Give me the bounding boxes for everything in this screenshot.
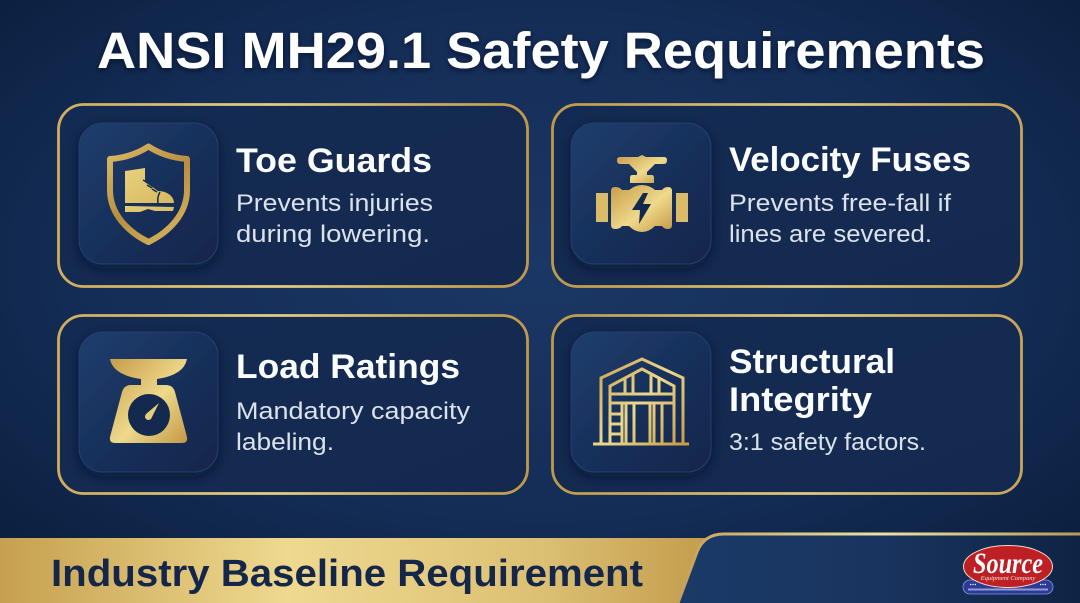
icon tile: load ratings: [79, 332, 218, 472]
heading: structural integrity: Structural: [729, 343, 895, 381]
text: structural integrity description: 3:1 safety factors.: [729, 429, 926, 456]
heading: velocity fuses: Velocity Fuses: [729, 141, 971, 179]
text: load ratings description: labeling.: [236, 429, 334, 456]
heading: toe guards: Toe Guards: [236, 142, 432, 180]
panel: structural integrity: [552, 316, 1022, 494]
icon: weighing scale: [110, 359, 187, 443]
icon: shield with boot: [110, 146, 187, 242]
icon tile: toe guards: [79, 123, 218, 264]
text: toe guards description: [236, 190, 433, 248]
logo: Source Equipment Company: Equipment Company: [980, 575, 1035, 582]
panel: toe guards: [58, 104, 528, 286]
panel: load ratings: [58, 316, 528, 494]
icon: building frame: [593, 359, 689, 444]
footer navy panel: [678, 534, 1080, 603]
icon tile: velocity fuses: [571, 123, 711, 264]
text: toe guards description: during lowering.: [236, 221, 430, 248]
panel: velocity fuses: [552, 104, 1022, 286]
heading: structural integrity: [729, 343, 895, 419]
text: velocity fuses description: [729, 190, 951, 248]
logo: Source Equipment Company: [963, 546, 1053, 594]
heading: structural integrity: Integrity: [729, 381, 872, 419]
footer label: Industry Baseline Requirement: [51, 553, 643, 595]
text: velocity fuses description: lines are severed.: [729, 221, 932, 248]
icon: valve with lightning bolt: [596, 155, 688, 232]
heading: load ratings: Load Ratings: [236, 348, 460, 386]
text: velocity fuses description: Prevents free-fall if: [729, 190, 951, 217]
text: toe guards description: Prevents injuries: [236, 190, 433, 217]
icon tile: structural integrity: [571, 332, 711, 472]
footer gold band: [0, 538, 720, 603]
logo: Source Equipment Company: Source: [973, 547, 1043, 580]
text: load ratings description: [236, 398, 471, 456]
text: load ratings description: Mandatory capacity: [236, 398, 471, 425]
title: ANSI MH29.1 Safety Requirements: [97, 22, 985, 79]
